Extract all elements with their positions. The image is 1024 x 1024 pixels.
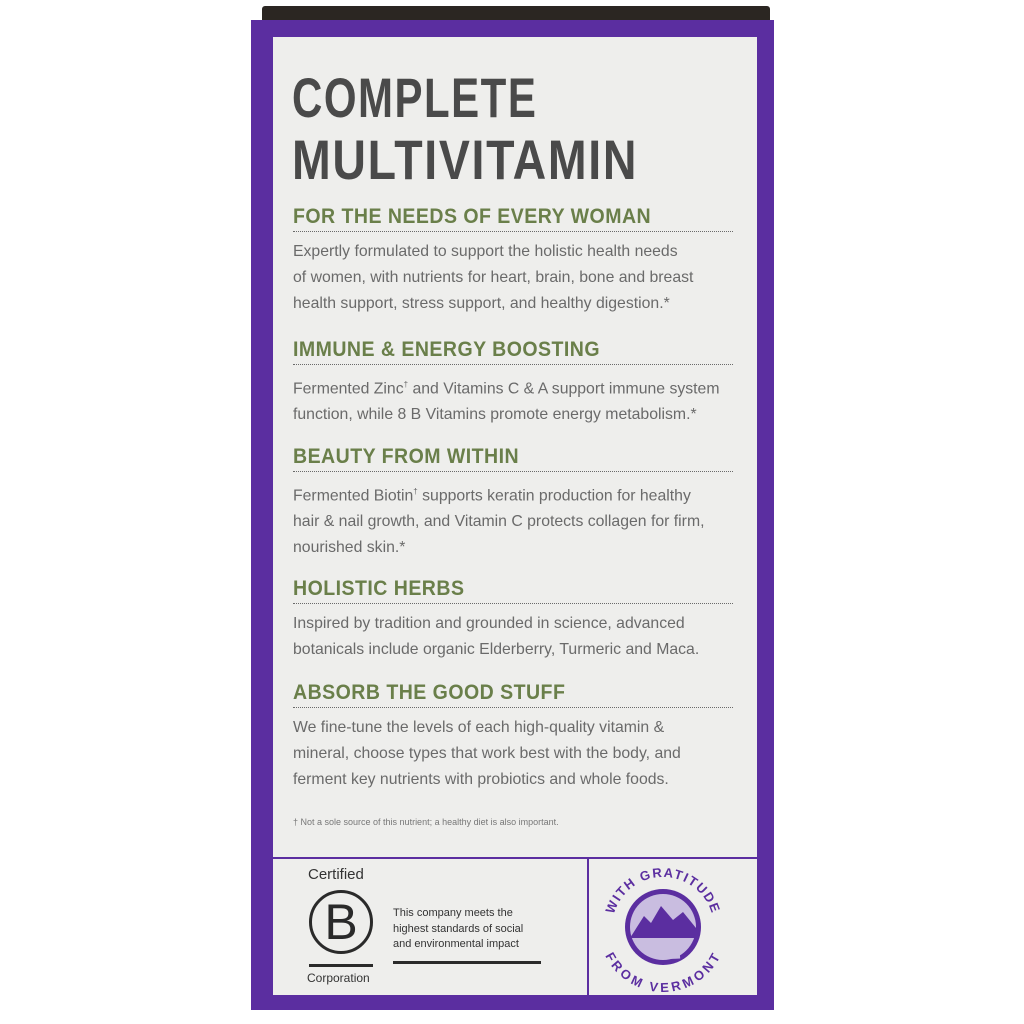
text: absorb: We fine-tune the levels of each high-quality vitamin & [293, 719, 664, 736]
text: needs: health support, stress support, and healthy digestion.* [293, 295, 670, 312]
heading: beauty: BEAUTY FROM WITHIN [293, 445, 519, 468]
title: MULTIVITAMIN [292, 128, 638, 191]
heading: needs [293, 204, 733, 232]
text: needs: of women, with nutrients for heart, brain, bone and breast [293, 269, 693, 286]
B corp text: and environmental impact [393, 938, 519, 950]
text: absorb: ferment key nutrients with probiotics and whole foods. [293, 771, 669, 788]
text: beauty: nourished skin.* [293, 539, 405, 556]
text: beauty [293, 487, 704, 556]
purple box [251, 20, 774, 1010]
text: absorb [293, 719, 681, 788]
vermont badge [605, 868, 720, 992]
heading: beauty [293, 444, 733, 472]
inner panel [273, 37, 757, 995]
title: COMPLETE [292, 66, 537, 129]
text: beauty: Fermented Biotin† supports keratin production for healthy [293, 487, 691, 504]
B corp logo: Corporation [307, 971, 370, 985]
text: immune: Fermented Zinc† and Vitamins C & A support immune system [293, 380, 719, 397]
heading: herbs [293, 576, 733, 604]
B corp logo [307, 866, 373, 985]
box lid [262, 6, 770, 22]
heading: immune [293, 337, 733, 365]
B corp logo: Certified [308, 866, 364, 883]
footnote: † Not a sole source of this nutrient; a healthy diet is also important. [293, 817, 559, 827]
B corp text: highest standards of social [393, 922, 523, 934]
text: immune [293, 380, 719, 423]
text: herbs: Inspired by tradition and grounded in science, advanced [293, 615, 685, 632]
text: herbs: botanicals include organic Elderberry, Turmeric and Maca. [293, 641, 699, 658]
heading: immune: IMMUNE & ENERGY BOOSTING [293, 338, 600, 361]
bottom dividers [273, 857, 757, 859]
heading: absorb: ABSORB THE GOOD STUFF [293, 681, 565, 704]
title [292, 66, 638, 191]
heading: needs: FOR THE NEEDS OF EVERY WOMAN [293, 205, 651, 228]
text: needs: Expertly formulated to support the holistic health needs [293, 243, 678, 260]
B corp text: This company meets the [393, 907, 513, 919]
text: absorb: mineral, choose types that work best with the body, and [293, 745, 681, 762]
heading: absorb [293, 680, 733, 708]
vermont badge: WITH GRATITUDE [605, 868, 720, 913]
text: herbs [293, 615, 699, 658]
text: needs [293, 243, 694, 312]
text: immune: function, while 8 B Vitamins promote energy metabolism.* [293, 406, 697, 423]
heading: herbs: HOLISTIC HERBS [293, 577, 464, 600]
text: beauty: hair & nail growth, and Vitamin C protects collagen for firm, [293, 513, 704, 530]
B corp text [393, 907, 541, 964]
B corp logo: B [324, 894, 358, 950]
